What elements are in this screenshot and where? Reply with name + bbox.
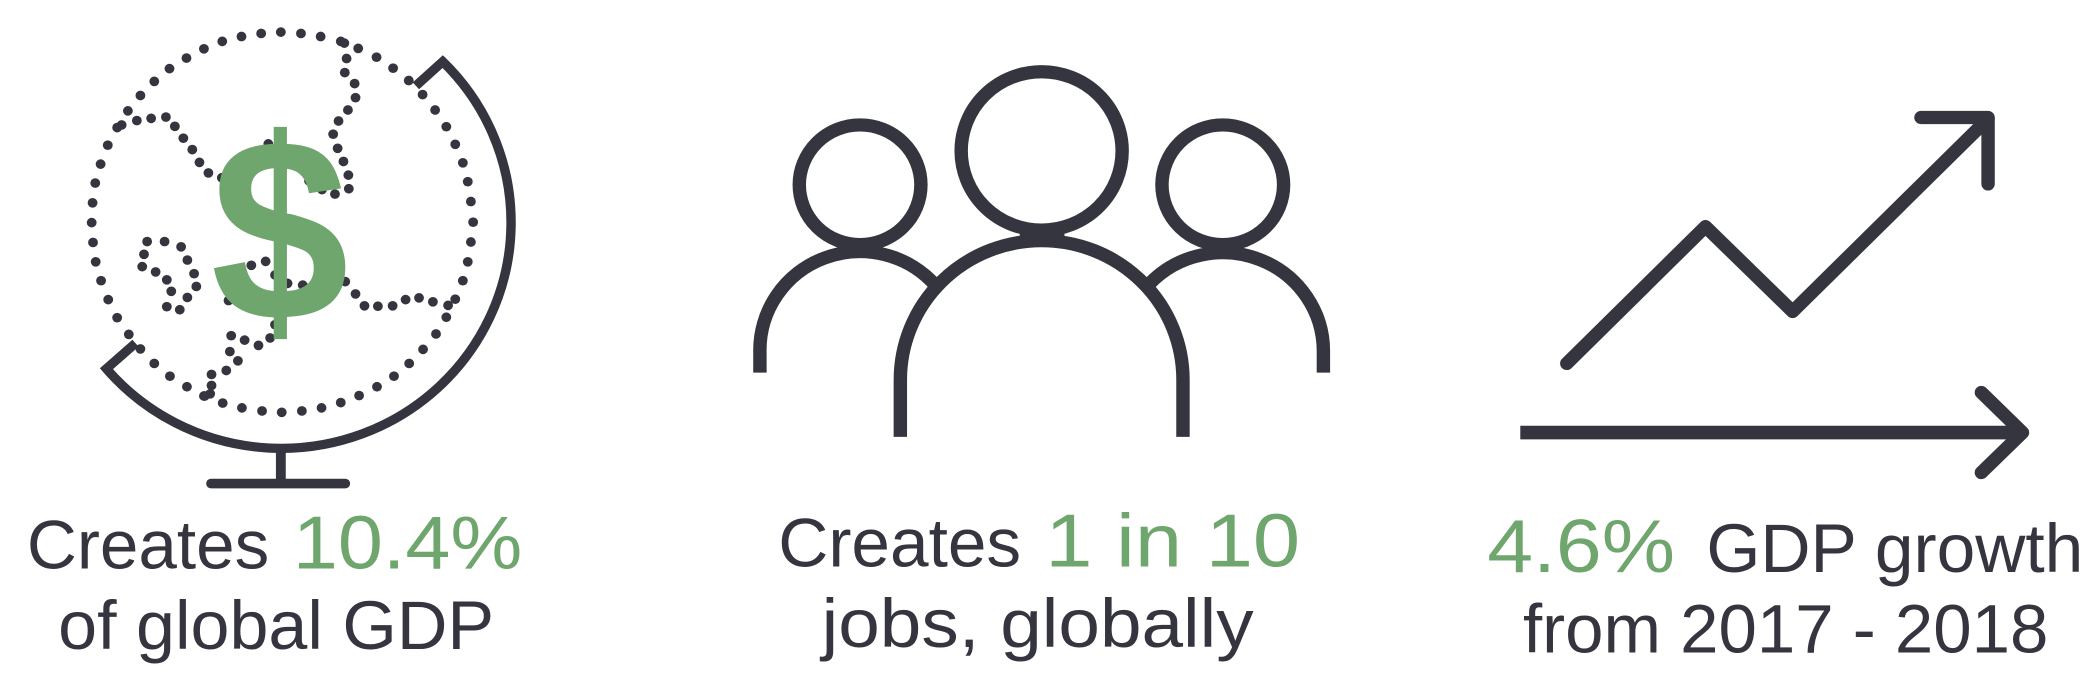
text: 4.6% GDP growth — [1487, 505, 2083, 588]
right person — [1149, 125, 1323, 373]
text: of global GDP: of global GDP — [58, 587, 494, 664]
globe stand — [106, 62, 511, 484]
icon: rising line arrow — [1567, 117, 1988, 363]
text: creates 1 in 10: Creates — [778, 504, 1021, 582]
left person — [760, 125, 936, 373]
text: 4.6% GDP growth: 4.6% — [1487, 505, 1675, 588]
panel: GDP growth — [1487, 117, 2083, 667]
icon: dollar sign: $ — [211, 85, 349, 375]
icon: three people — [760, 72, 1323, 437]
text: jobs, globally: jobs, globally — [819, 584, 1254, 662]
text: creates 1 in 10: 1 in 10 — [1045, 499, 1300, 583]
icon: globe with dollar sign — [87, 27, 511, 484]
text: creates 10.4%: Creates — [27, 506, 269, 583]
centre person — [900, 72, 1183, 437]
text: creates 1 in 10 — [778, 499, 1300, 583]
text: from 2017 - 2018: from 2017 - 2018 — [1523, 590, 2048, 667]
icon: horizontal axis arrow — [1520, 392, 2023, 473]
dotted globe outline and continents — [87, 27, 478, 417]
text: creates 10.4% — [27, 501, 522, 584]
panel: jobs — [760, 72, 1323, 662]
panel: global GDP — [27, 27, 522, 664]
text: 4.6% GDP growth: GDP growth — [1706, 510, 2083, 587]
text: creates 10.4%: 10.4% — [293, 501, 522, 584]
